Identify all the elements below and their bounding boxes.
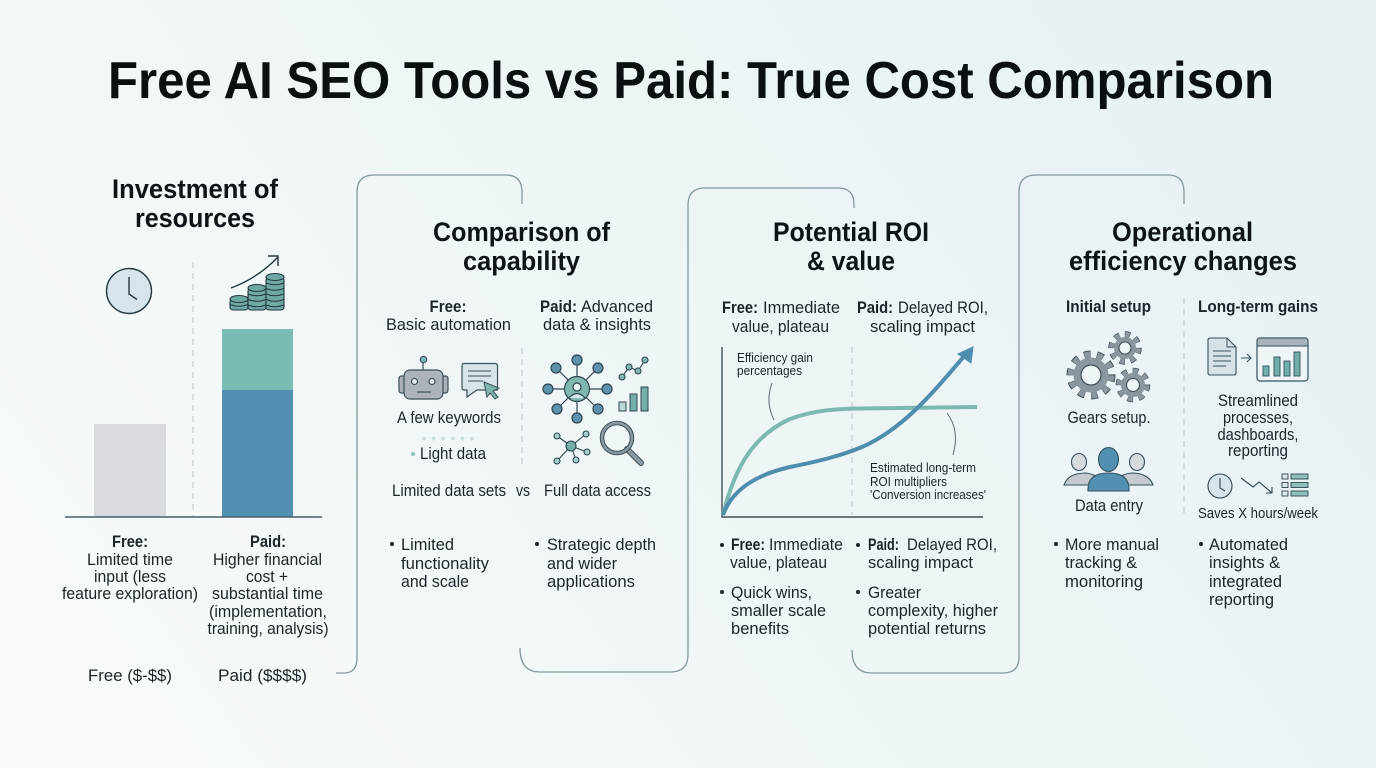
subheading: free ROI: Immediate — [763, 298, 840, 317]
panel frame: ROI bottom and efficiency top bracket — [852, 175, 1184, 673]
bullets: paid ROI — [856, 535, 998, 638]
subheading: paid ROI: Delayed ROI, — [898, 298, 988, 317]
text: paid investment: Paid: — [250, 532, 286, 551]
panel: potential ROI and value — [720, 217, 998, 638]
bullet: free capability: Limited — [401, 535, 454, 554]
subheading: free: Basic automation — [386, 315, 511, 334]
bullet: free capability: functionality — [401, 554, 489, 573]
icon: gears — [1070, 334, 1147, 399]
bullets: paid ROI: complexity, higher — [868, 601, 998, 620]
subheading: paid ROI — [857, 298, 988, 336]
text: data access comparison: Limited data sets — [392, 481, 506, 500]
label: free cost: Free ($-$$) — [88, 666, 172, 685]
heading: investment: resources — [135, 203, 255, 233]
panel: investment of resources — [62, 174, 328, 685]
bullet: long-term effect: reporting — [1209, 590, 1274, 609]
heading: ROI: & value — [807, 246, 895, 276]
bullet: long-term effect: insights & — [1209, 553, 1281, 572]
bullets: free ROI: value, plateau — [730, 553, 827, 572]
text: free investment: feature exploration) — [62, 584, 198, 603]
curve: free plateau — [723, 407, 977, 515]
bullet: paid capability: and wider — [547, 554, 617, 573]
annotation: long-term multipliers: ROI multipliers — [870, 474, 947, 489]
icon: robot — [399, 356, 448, 399]
bullet: paid capability: Strategic depth — [547, 535, 656, 554]
bullet: initial setup effect: tracking & — [1065, 553, 1138, 572]
text: free investment: Limited time — [87, 550, 173, 569]
bullets: free ROI — [720, 535, 843, 638]
annotation: long-term multipliers — [870, 413, 986, 502]
label: data entry: Data entry — [1075, 496, 1143, 515]
text: free investment: Free: — [112, 532, 148, 551]
heading: investment — [112, 174, 279, 233]
bullets: paid ROI: scaling impact — [868, 553, 973, 572]
bullets: free ROI: Free: — [731, 535, 765, 554]
heading: efficiency: efficiency changes — [1069, 246, 1297, 276]
subheading: paid: Paid: — [540, 297, 577, 316]
bullets: free ROI: Quick wins, — [731, 583, 812, 602]
bullets: free ROI: benefits — [731, 619, 789, 638]
subheading: paid ROI: scaling impact — [870, 317, 975, 336]
subheading: free ROI: Free: — [722, 298, 758, 317]
bullets: paid ROI: Delayed ROI, — [907, 535, 997, 554]
label: gears setup: Gears setup. — [1068, 408, 1150, 427]
text: streamlined: dashboards, — [1218, 425, 1298, 444]
bullet: free capability: and scale — [401, 572, 469, 591]
text: streamlined: Streamlined — [1218, 391, 1298, 410]
text: data access comparison: vs — [516, 481, 530, 500]
text: free data — [397, 408, 501, 463]
subheading: long-term gains: Long-term gains — [1198, 297, 1318, 316]
annotation: efficiency gain — [737, 350, 813, 420]
bullet: free capability — [390, 535, 489, 591]
text: paid investment: training, analysis) — [208, 619, 328, 638]
text: streamlined — [1218, 391, 1298, 460]
heading: investment: Investment of — [112, 174, 279, 204]
bullet: initial setup effect: monitoring — [1065, 572, 1143, 591]
icon: document to dashboard — [1208, 338, 1308, 381]
subheading: paid ROI: Paid: — [857, 298, 893, 317]
bullet: long-term effect: integrated — [1209, 572, 1282, 591]
panel frame: capability top-left bracket — [336, 175, 522, 673]
heading: efficiency: Operational — [1112, 217, 1253, 247]
annotation: efficiency gain: Efficiency gain — [737, 350, 813, 365]
annotation: efficiency gain: percentages — [737, 363, 802, 378]
bullets: free ROI: smaller scale — [731, 601, 826, 620]
text: free investment — [62, 532, 198, 603]
bullets: paid ROI: Paid: — [868, 535, 899, 554]
heading: capability: capability — [463, 246, 580, 276]
panel: comparison of capability — [386, 217, 656, 591]
panel frame: capability bottom and ROI top bracket — [520, 188, 854, 672]
subheading: paid — [540, 297, 653, 334]
arrow head — [958, 347, 973, 363]
line chart: ROI over time — [722, 347, 986, 517]
label: saves hours: Saves X hours/week — [1198, 505, 1318, 522]
bullets: free ROI: Immediate — [769, 535, 843, 554]
bullet: long-term effect — [1199, 535, 1288, 609]
text: paid investment: substantial time — [212, 584, 323, 603]
heading: ROI: Potential ROI — [773, 217, 929, 247]
text: paid investment: (implementation, — [209, 602, 327, 621]
curve: paid scaling — [723, 354, 966, 515]
bullet: paid capability: applications — [547, 572, 635, 591]
icon: bars — [619, 387, 648, 411]
annotation: long-term multipliers: 'Conversion increases' — [870, 487, 986, 502]
subheading: initial setup: Initial setup — [1066, 297, 1151, 316]
subheading: free ROI: value, plateau — [732, 317, 829, 336]
icon: clock — [106, 268, 152, 314]
icon: list — [1282, 474, 1308, 496]
text: streamlined: reporting — [1228, 441, 1288, 460]
text: data access comparison: Full data access — [544, 481, 651, 500]
text: free investment: input (less — [94, 567, 166, 586]
annotation: long-term multipliers: Estimated long-term — [870, 460, 976, 475]
bullet: initial setup effect — [1054, 535, 1159, 591]
text: paid investment: Higher financial — [213, 550, 322, 569]
bullet: paid capability — [535, 535, 656, 591]
bullets: paid ROI: potential returns — [868, 619, 986, 638]
icon: people — [1064, 448, 1153, 491]
label: paid cost: Paid ($$$$) — [218, 666, 307, 685]
text: streamlined: processes, — [1223, 408, 1293, 427]
bullets: paid ROI: Greater — [868, 583, 921, 602]
text: data access comparison — [392, 481, 651, 500]
subheading: free ROI — [722, 298, 840, 336]
subheading: paid: data & insights — [543, 315, 651, 334]
icon: down trend arrow — [1241, 478, 1272, 493]
heading: ROI — [773, 217, 929, 276]
bullet: initial setup effect: More manual — [1065, 535, 1159, 554]
text: paid investment: cost + — [246, 567, 288, 586]
icon: magnifier — [602, 423, 641, 463]
subheading: free — [386, 297, 511, 334]
icon: data network — [543, 355, 612, 423]
title: Free AI SEO Tools vs Paid: True Cost Comparison — [108, 52, 1274, 110]
text: free data: A few keywords — [397, 408, 501, 427]
text: free data: Light data — [420, 444, 486, 463]
subheading: free: Free: — [430, 297, 466, 316]
bar chart: free vs paid investment — [65, 262, 322, 517]
bullet: long-term effect: Automated — [1209, 535, 1288, 554]
heading: capability — [433, 217, 611, 276]
icon: small network — [554, 431, 590, 464]
heading: capability: Comparison of — [433, 217, 611, 247]
icon: line trend — [619, 357, 648, 380]
text: paid investment — [208, 532, 328, 638]
subheading: paid: Advanced — [581, 297, 653, 316]
panel: operational efficiency changes — [1054, 217, 1318, 609]
icon: chat with cursor — [462, 364, 499, 399]
icon: small clock — [1208, 474, 1232, 498]
heading: efficiency — [1069, 217, 1297, 276]
icon: coin stacks with rising arrow — [230, 256, 284, 310]
